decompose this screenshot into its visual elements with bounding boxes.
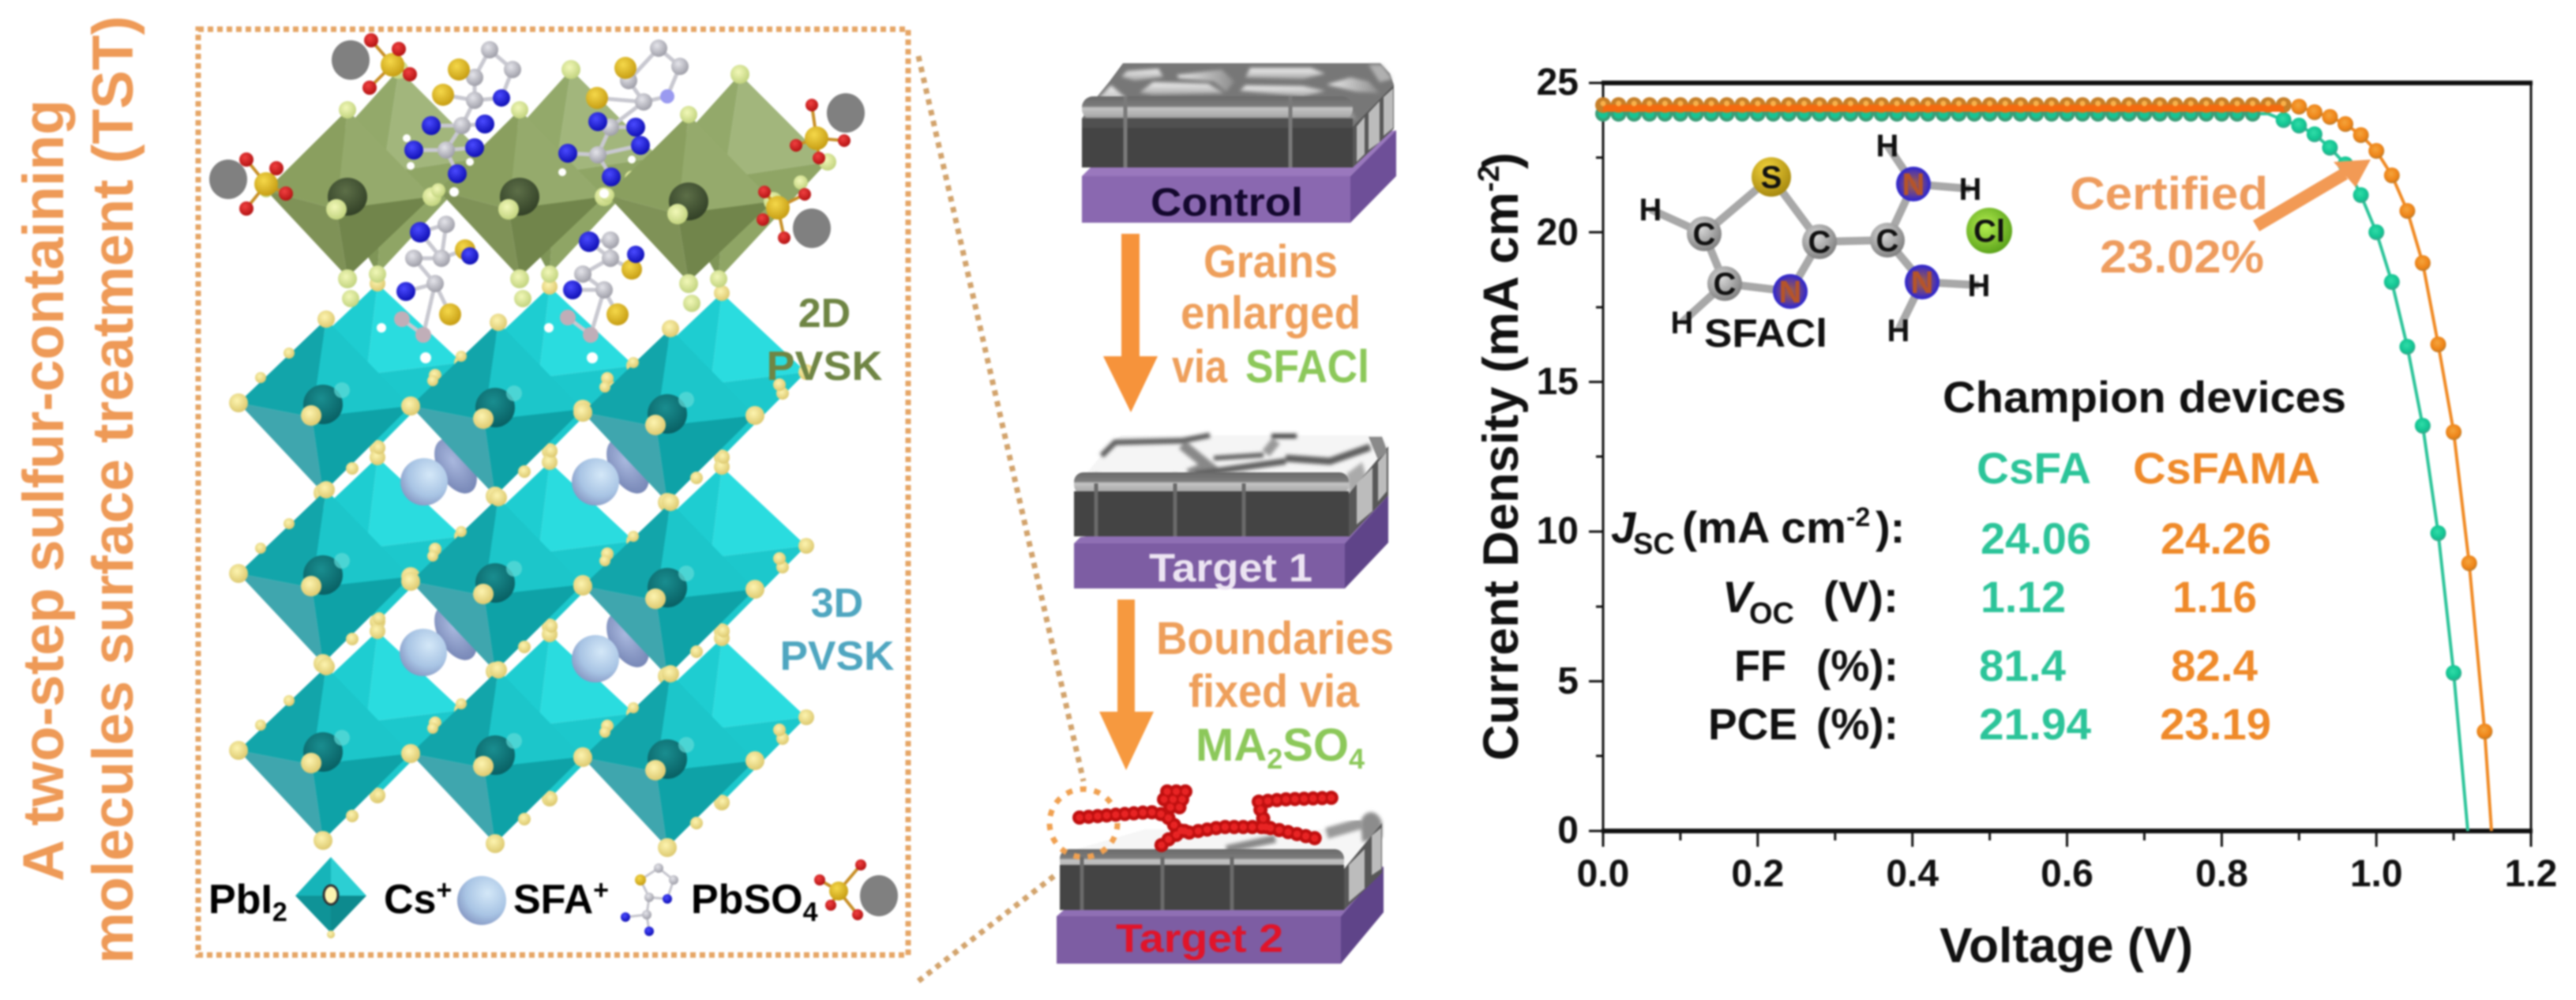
y-axis tick labels: 20 xyxy=(1537,212,1579,254)
text: Boundaries fixed via MA2SO4: fixed via xyxy=(1188,666,1360,717)
callout: certified efficiency xyxy=(2070,160,2371,283)
caesium cation spheres xyxy=(400,431,658,682)
text: Boundaries fixed via MA2SO4: 2 xyxy=(1267,742,1282,775)
inset: SFACl molecule: N xyxy=(1779,275,1801,310)
legend icon: octahedron xyxy=(295,857,366,938)
label: 3D PVSK: 3D xyxy=(811,581,863,626)
title: rotated two-line heading: A two-step sulfur-containing xyxy=(12,100,76,882)
title: rotated two-line heading: molecules surface treatment (TST) xyxy=(81,16,145,964)
row: FF xyxy=(1734,641,2258,690)
text: Grains enlarged via SFACl: enlarged xyxy=(1181,288,1361,339)
text: Grains enlarged via SFACl: SFACl xyxy=(1245,341,1369,393)
SFA molecule lower left xyxy=(377,216,479,363)
column headers: CsFAMA xyxy=(2133,443,2320,493)
panel: film stack Target 1 xyxy=(1074,435,1388,590)
label: Target 2: Target 2 xyxy=(1116,916,1283,961)
row: Jsc xyxy=(1611,502,2271,563)
inset: SFACl molecule: C xyxy=(1876,224,1898,258)
arrow to certified point xyxy=(2256,174,2345,226)
label: 2D PVSK: PVSK xyxy=(766,344,883,389)
inset: SFACl molecule: C xyxy=(1714,267,1736,302)
inset: SFACl molecule: H xyxy=(1671,306,1693,340)
inset: SFACl molecule: N xyxy=(1911,265,1933,300)
callout: certified efficiency: Certified xyxy=(2070,168,2268,220)
PbSO4 cluster right lower xyxy=(757,186,831,248)
grain side panels xyxy=(1353,85,1394,167)
inset: SFACl molecule: H xyxy=(1887,314,1909,348)
MA2SO4 red molecular chain xyxy=(1080,791,1332,848)
table heading: Champion devices xyxy=(1943,372,2346,422)
text: Boundaries fixed via MA2SO4: SO xyxy=(1282,720,1349,771)
SFA molecule top left xyxy=(403,41,521,197)
text: Grains enlarged via SFACl: Grains xyxy=(1204,236,1338,288)
row: Jsc: J xyxy=(1611,502,1637,552)
inset: SFACl molecule: Cl xyxy=(1973,214,2005,249)
row: PCE: (%): xyxy=(1816,699,1898,749)
x-axis title: Voltage (V) xyxy=(1940,919,2193,973)
y-axis tick labels: 25 xyxy=(1537,62,1579,103)
inset: SFACl molecule: N xyxy=(1902,167,1924,202)
row: Voc: (V): xyxy=(1823,572,1898,622)
inset: SFACl molecule: H xyxy=(1876,129,1898,164)
legend: PbSO4 label: PbSO xyxy=(691,877,803,923)
row: Voc: V xyxy=(1722,572,1756,622)
x-axis tick labels: 0.6 xyxy=(2041,853,2093,895)
grain top surface xyxy=(1082,63,1394,126)
text: Grains enlarged via SFACl: via xyxy=(1172,341,1228,393)
zoom callout lines from Target 2 to dotted box xyxy=(918,56,1083,981)
series: CsFAMA orange xyxy=(1603,99,2492,831)
legend icon: SFA molecule xyxy=(621,863,678,936)
x-axis tick labels: 1.0 xyxy=(2350,853,2403,895)
text: Boundaries fixed via MA2SO4 xyxy=(1156,613,1394,775)
y-axis title: ) xyxy=(1474,152,1529,169)
arrow: control to target 1 xyxy=(1103,234,1158,412)
grain side panels xyxy=(1344,823,1382,910)
inset: SFACl molecule: H xyxy=(1959,172,1981,207)
legend icon: PbSO4 xyxy=(814,859,898,920)
inset: SFACl molecule: C xyxy=(1808,225,1831,260)
row: Voc: 1.16 xyxy=(2172,572,2257,622)
row: Jsc: -2 xyxy=(1846,502,1870,532)
row: FF: (%): xyxy=(1816,641,1898,690)
panel: film stack Target 2 xyxy=(1050,789,1384,964)
row: Jsc: 24.26 xyxy=(2161,513,2271,563)
row: Voc: 1.12 xyxy=(1981,572,2066,622)
text: Boundaries fixed via MA2SO4: Boundaries xyxy=(1156,613,1394,664)
inset: SFACl molecule: S xyxy=(1761,160,1782,195)
row: Voc: OC xyxy=(1749,597,1794,630)
x-axis tick labels: 0.4 xyxy=(1886,853,1939,895)
inset: SFACl molecule: H xyxy=(1968,269,1990,303)
text: Boundaries fixed via MA2SO4: MA xyxy=(1196,720,1267,771)
row: PCE: PCE xyxy=(1708,699,1797,749)
legend: PbSO4 label: 4 xyxy=(803,897,818,927)
inset: SFACl molecule xyxy=(1639,129,2012,355)
row: PCE: 21.94 xyxy=(1979,699,2091,749)
label: Control: Control xyxy=(1151,180,1303,224)
row: FF: 82.4 xyxy=(2171,641,2258,690)
y-axis tick labels: 10 xyxy=(1537,510,1579,552)
label: 3D PVSK xyxy=(780,581,895,679)
grain side panels xyxy=(1349,437,1388,537)
row: FF: 81.4 xyxy=(1979,641,2066,690)
inset label: SFACl: SFACl xyxy=(1704,311,1827,355)
row: PCE: 23.19 xyxy=(2160,699,2271,749)
y-axis title: Current Density (mA cm xyxy=(1474,192,1529,761)
text: Boundaries fixed via MA2SO4: 4 xyxy=(1349,742,1365,775)
PbSO4 cluster left xyxy=(209,152,293,216)
panel: crystal structure in dotted box xyxy=(198,29,908,955)
legend: Cs+ label: + xyxy=(436,875,452,905)
y-axis tick labels: 15 xyxy=(1537,361,1579,403)
inset: SFACl molecule: C xyxy=(1693,217,1715,252)
row: PCE xyxy=(1708,699,2271,749)
panel: film stack Control xyxy=(1082,63,1396,224)
y-axis tick labels: 5 xyxy=(1557,660,1579,702)
y-axis tick labels: 0 xyxy=(1557,810,1579,852)
legend: PbI2 label: PbI xyxy=(208,877,272,923)
circle callout on grain boundary xyxy=(1050,789,1117,857)
label: 3D PVSK: PVSK xyxy=(780,633,895,679)
SFA molecule lower right xyxy=(544,231,644,363)
legend: PbI2 label: 2 xyxy=(272,897,287,927)
row: Jsc: SC xyxy=(1633,528,1675,561)
legend: SFA+ label: + xyxy=(593,875,609,905)
row: Jsc: 24.06 xyxy=(1981,513,2091,563)
legend icon: Cs sphere xyxy=(457,876,506,925)
SFA molecule top right xyxy=(558,39,689,198)
2D perovskite rear octahedra xyxy=(316,60,836,288)
PbSO4 cluster top xyxy=(332,33,417,95)
legend xyxy=(208,857,898,938)
PbSO4 cluster right upper xyxy=(790,93,865,164)
inset: SFACl molecule: H xyxy=(1639,193,1662,227)
chart: J-V curves xyxy=(1473,62,2557,973)
3D perovskite rear octahedra xyxy=(291,276,814,810)
table: champion device parameters xyxy=(1611,372,2346,749)
title: rotated two-line heading xyxy=(12,16,145,964)
callout: certified efficiency: 23.02% xyxy=(2100,231,2264,283)
y-axis tick labels xyxy=(1537,62,1579,852)
grain top surface xyxy=(1074,435,1388,506)
legend: SFA+ label: SFA xyxy=(513,877,593,923)
2D perovskite front octahedra xyxy=(259,101,783,312)
row: Jsc: ): xyxy=(1876,502,1905,552)
legend: Cs+ label: Cs xyxy=(384,877,436,923)
arrow: target 1 to target 2 xyxy=(1099,600,1154,770)
row: Voc xyxy=(1722,572,2257,630)
label: Target 1: Target 1 xyxy=(1149,546,1312,590)
column headers: CsFA xyxy=(1977,443,2091,493)
column headers xyxy=(1977,443,2320,493)
x-axis tick labels: 0.2 xyxy=(1731,853,1784,895)
text: Grains enlarged via SFACl xyxy=(1172,236,1369,393)
row: Jsc: (mA cm xyxy=(1682,502,1846,552)
row: FF: FF xyxy=(1734,641,1786,690)
x-axis tick labels xyxy=(1577,853,2557,895)
series: CsFA green xyxy=(1603,112,2468,831)
x-axis tick labels: 0.0 xyxy=(1577,853,1629,895)
label: 2D PVSK: 2D xyxy=(798,291,851,336)
x-axis tick labels: 1.2 xyxy=(2505,853,2557,895)
3D perovskite front octahedra xyxy=(229,310,764,857)
x-axis tick labels: 0.8 xyxy=(2195,853,2248,895)
grain top surface xyxy=(1068,812,1382,869)
plot frame xyxy=(1589,83,2533,847)
y-axis title: -2 xyxy=(1473,165,1506,192)
label: 2D PVSK xyxy=(766,291,883,389)
